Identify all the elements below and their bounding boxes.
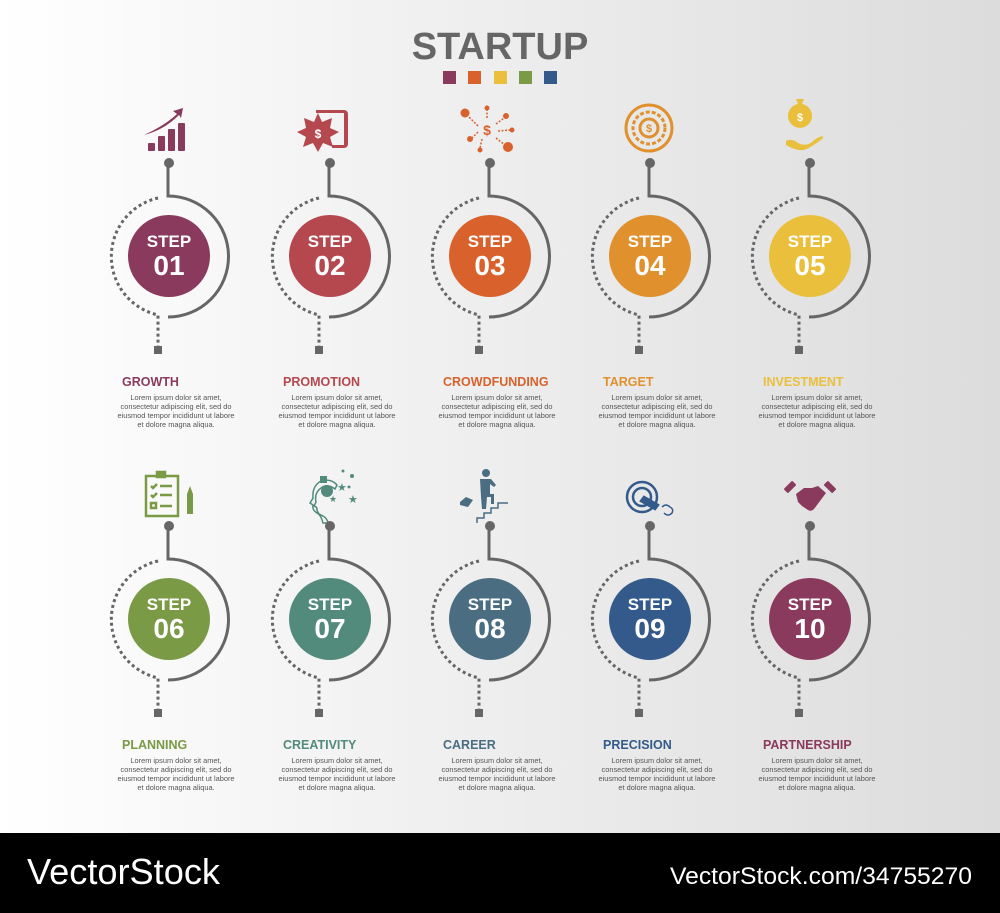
icon: crowdfunding network: $ — [483, 122, 491, 138]
body text: consectetur adipiscing elit, sed do — [442, 765, 552, 774]
body text: consectetur adipiscing elit, sed do — [282, 765, 392, 774]
step 09: precision: 09 — [634, 613, 666, 644]
footer url: VectorStock.com/34755270 — [670, 863, 972, 890]
body text: eiusmod tempor incididunt ut labore — [278, 774, 396, 783]
heading: crowdfunding: CROWDFUNDING — [443, 375, 549, 389]
body text: consectetur adipiscing elit, sed do — [762, 402, 872, 411]
body text: et dolore magna aliqua. — [618, 783, 696, 792]
body text: consectetur adipiscing elit, sed do — [282, 402, 392, 411]
step 06: planning: 06 — [153, 613, 185, 644]
step 08: career — [432, 469, 556, 792]
body text: Lorem ipsum dolor sit amet, — [611, 393, 703, 402]
step 05: investment: STEP — [788, 232, 832, 251]
step 04: target: STEP — [628, 232, 672, 251]
step 04: target — [592, 105, 716, 429]
icon: head with stars: ★ — [337, 482, 347, 494]
step 08: career: 08 — [474, 613, 506, 644]
body text: Lorem ipsum dolor sit amet, — [291, 756, 383, 765]
icon: handshake — [784, 481, 836, 511]
step 02: promotion: 02 — [314, 250, 346, 281]
step 05: investment: 05 — [794, 250, 826, 281]
body text: consectetur adipiscing elit, sed do — [602, 402, 712, 411]
icon: clipboard — [146, 472, 193, 516]
step 01: growth — [111, 108, 235, 429]
body text: consectetur adipiscing elit, sed do — [442, 402, 552, 411]
icon: money bag in hand — [786, 99, 823, 150]
step 08: career: STEP — [468, 595, 512, 614]
body text: Lorem ipsum dolor sit amet, — [291, 393, 383, 402]
body text: et dolore magna aliqua. — [137, 420, 215, 429]
step 07: creativity: STEP — [308, 595, 352, 614]
icon: target with rocket — [627, 482, 673, 515]
body text: et dolore magna aliqua. — [458, 420, 536, 429]
title: STARTUP — [412, 26, 588, 68]
step 10: partnership: STEP — [788, 595, 832, 614]
body text: consectetur adipiscing elit, sed do — [121, 765, 231, 774]
body text: et dolore magna aliqua. — [778, 783, 856, 792]
icon: head with stars — [310, 470, 358, 523]
body text: Lorem ipsum dolor sit amet, — [451, 393, 543, 402]
color squares legend — [443, 71, 557, 84]
step 05: investment — [752, 99, 876, 429]
body text: Lorem ipsum dolor sit amet, — [130, 393, 222, 402]
body text: consectetur adipiscing elit, sed do — [602, 765, 712, 774]
step 03: crowdfunding: STEP — [468, 232, 512, 251]
heading: growth: GROWTH — [122, 375, 179, 389]
body text: et dolore magna aliqua. — [458, 783, 536, 792]
body text: eiusmod tempor incididunt ut labore — [438, 411, 556, 420]
body text: eiusmod tempor incididunt ut labore — [758, 411, 876, 420]
icon: man climbing stairs — [460, 469, 508, 523]
step 03: crowdfunding: 03 — [474, 250, 506, 281]
heading: promotion: PROMOTION — [283, 375, 360, 389]
body text: Lorem ipsum dolor sit amet, — [611, 756, 703, 765]
step 07: creativity: 07 — [314, 613, 346, 644]
step 09: precision — [592, 482, 716, 792]
heading: career: CAREER — [443, 738, 496, 752]
body text: et dolore magna aliqua. — [778, 420, 856, 429]
body text: consectetur adipiscing elit, sed do — [121, 402, 231, 411]
body text: Lorem ipsum dolor sit amet, — [771, 756, 863, 765]
body text: eiusmod tempor incididunt ut labore — [598, 411, 716, 420]
footer bar — [0, 833, 1000, 913]
heading: planning: PLANNING — [122, 738, 187, 752]
step 10: partnership: 10 — [794, 613, 826, 644]
step 01: growth: 01 — [153, 250, 185, 281]
icon: promotion — [297, 110, 348, 152]
step 04: target: 04 — [634, 250, 666, 281]
body text: et dolore magna aliqua. — [298, 783, 376, 792]
step 01: growth: STEP — [147, 232, 191, 251]
step 02: promotion: STEP — [308, 232, 352, 251]
body text: et dolore magna aliqua. — [137, 783, 215, 792]
body text: Lorem ipsum dolor sit amet, — [771, 393, 863, 402]
icon: target coin: $ — [646, 123, 652, 135]
body text: consectetur adipiscing elit, sed do — [762, 765, 872, 774]
icon: growth chart — [144, 108, 185, 151]
body text: eiusmod tempor incididunt ut labore — [278, 411, 396, 420]
step 06: planning: STEP — [147, 595, 191, 614]
body text: Lorem ipsum dolor sit amet, — [130, 756, 222, 765]
icon: money bag in hand: $ — [797, 112, 803, 124]
body text: eiusmod tempor incididunt ut labore — [117, 774, 235, 783]
step 07: creativity — [272, 470, 396, 792]
heading: precision: PRECISION — [603, 738, 672, 752]
body text: et dolore magna aliqua. — [618, 420, 696, 429]
heading: partnership: PARTNERSHIP — [763, 738, 852, 752]
footer logo: VectorStock — [27, 851, 221, 892]
heading: target: TARGET — [603, 375, 654, 389]
step 02: promotion — [272, 110, 396, 429]
heading: creativity: CREATIVITY — [283, 738, 357, 752]
icon: head with stars: ★ — [329, 494, 337, 504]
body text: eiusmod tempor incididunt ut labore — [758, 774, 876, 783]
icon: crowdfunding network — [461, 106, 514, 152]
step 10: partnership — [752, 481, 876, 792]
body text: eiusmod tempor incididunt ut labore — [598, 774, 716, 783]
body text: et dolore magna aliqua. — [298, 420, 376, 429]
icon: target coin — [626, 105, 672, 151]
body text: eiusmod tempor incididunt ut labore — [438, 774, 556, 783]
icon: head with stars: ★ — [348, 494, 358, 506]
body text: Lorem ipsum dolor sit amet, — [451, 756, 543, 765]
body text: eiusmod tempor incididunt ut labore — [117, 411, 235, 420]
icon: promotion: $ — [315, 127, 322, 141]
step 09: precision: STEP — [628, 595, 672, 614]
heading: investment: INVESTMENT — [763, 375, 844, 389]
step 06: planning — [111, 472, 235, 792]
step 03: crowdfunding — [432, 106, 556, 429]
